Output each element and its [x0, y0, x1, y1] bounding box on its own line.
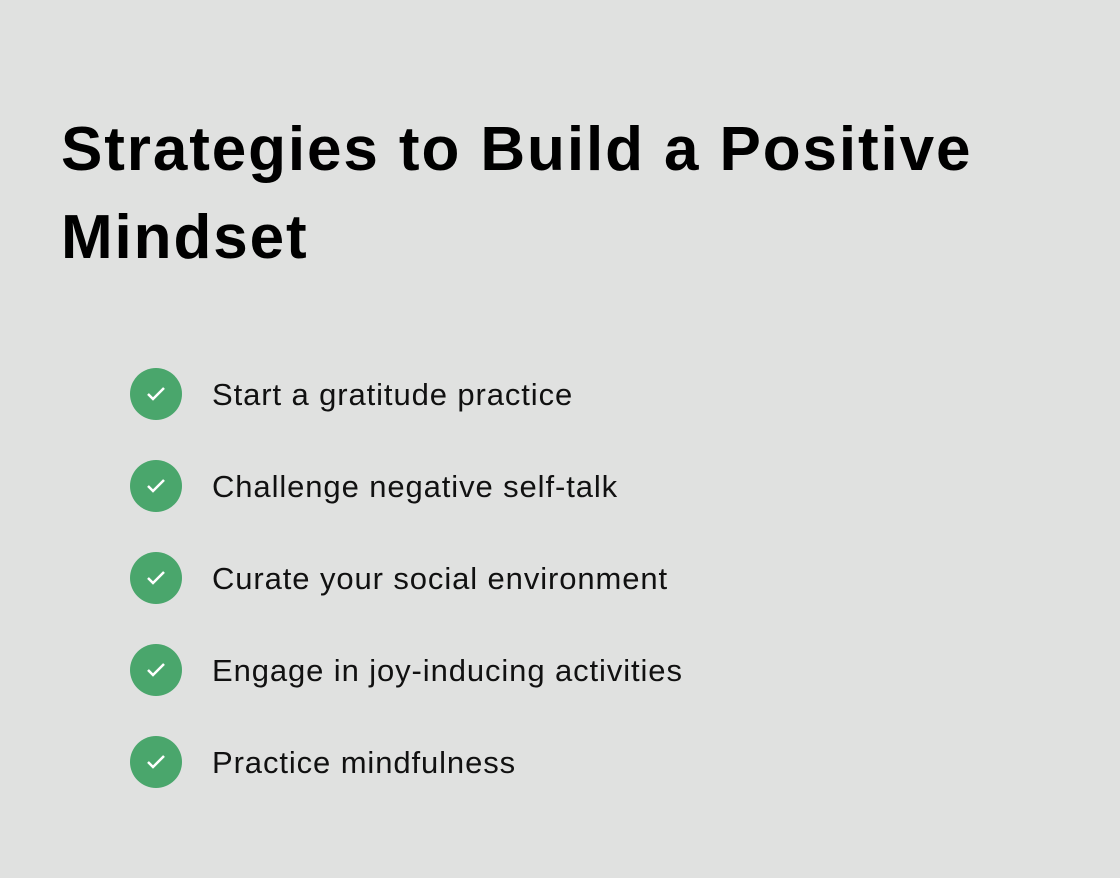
list item: joy: Engage in joy-inducing activities	[212, 653, 683, 688]
list item: joy	[130, 644, 683, 696]
list item: social: Curate your social environment	[212, 561, 668, 596]
list item: gratitude: Start a gratitude practice	[212, 377, 573, 412]
list item: social	[130, 552, 668, 604]
list item: self-talk: Challenge negative self-talk	[212, 469, 618, 504]
list item: mindfulness: Practice mindfulness	[212, 745, 516, 780]
title: Mindset	[61, 203, 309, 272]
title: Strategies to Build a Positive	[61, 115, 972, 184]
list item: self-talk	[130, 460, 618, 512]
icon: check	[130, 460, 182, 512]
title	[61, 115, 972, 272]
list item: gratitude	[130, 368, 573, 420]
icon: check	[130, 736, 182, 788]
list item: mindfulness	[130, 736, 516, 788]
icon: check	[130, 644, 182, 696]
icon: check	[130, 552, 182, 604]
icon: check	[130, 368, 182, 420]
